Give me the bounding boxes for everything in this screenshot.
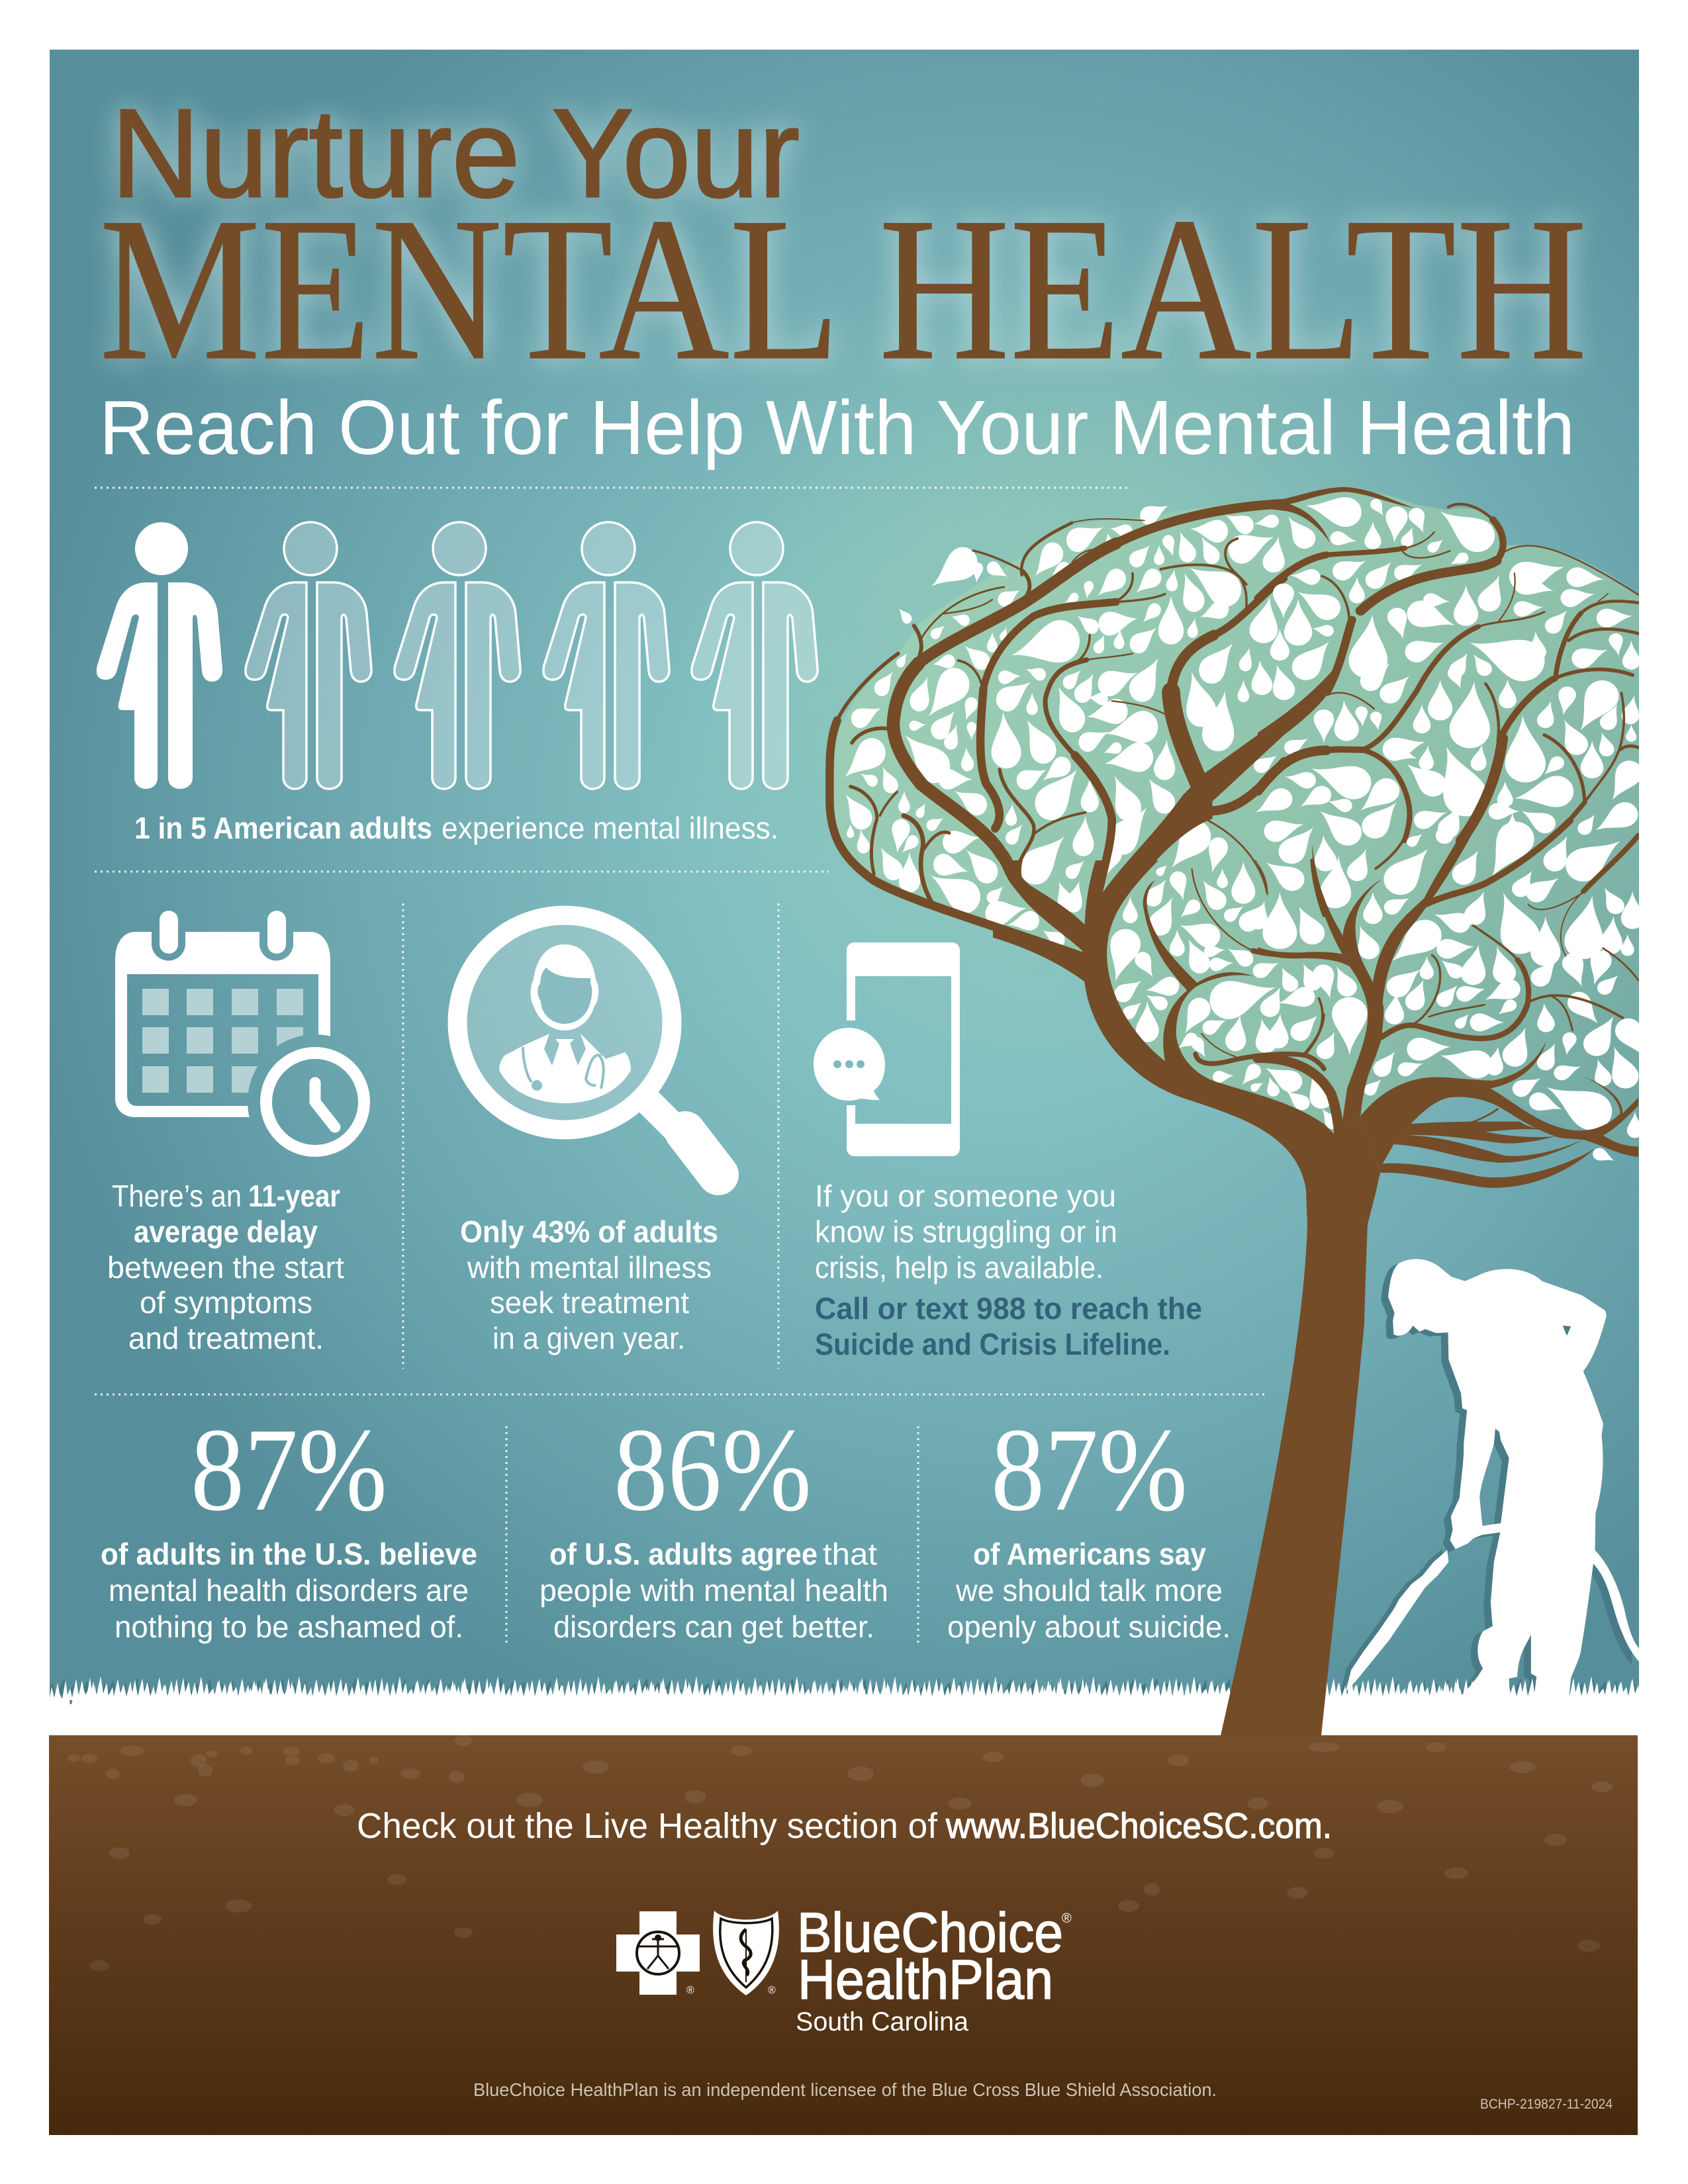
illustration: man's drop shadow (1340, 1262, 1632, 1714)
soil ground (49, 1735, 1638, 2135)
leaves: teardrops lower right (1248, 813, 1657, 1166)
title: Nurture Your Mental Health (99, 83, 1587, 403)
icon: phone with chat bubble (814, 942, 960, 1156)
upper-left lobe (829, 498, 1284, 956)
stat: 86% can get better: of U.S. adults agree (549, 1537, 818, 1571)
text: crisis help: know is struggling or in (815, 1214, 1117, 1249)
central lobe (993, 860, 1324, 1191)
trunk (1221, 1124, 1380, 1735)
wordmark: BlueChoice (797, 1901, 1063, 1964)
stat: 86% can get better (539, 1404, 888, 1644)
text: crisis help: If you or someone you (815, 1179, 1116, 1213)
text: only 43% of adults: seek treatment (490, 1285, 689, 1320)
stat: 87% talk about suicide (947, 1404, 1231, 1644)
illustration: man watering with hose (1346, 1259, 1639, 1711)
text: crisis help (815, 1179, 1202, 1361)
grass strip (50, 1676, 1664, 1735)
branches upper left (829, 504, 1284, 956)
icon: magnifier with doctor (457, 915, 718, 1175)
stat: 87% not ashamed: of adults in the U.S. believe (101, 1537, 477, 1571)
footer link line: Check out the Live Healthy section of (357, 1806, 938, 1846)
text: only 43% of adults (460, 1214, 718, 1355)
wordmark: HealthPlan (798, 1948, 1053, 2011)
text: crisis help: Suicide and Crisis Lifeline. (815, 1327, 1170, 1361)
illustration: brain-shaped tree (828, 487, 1657, 1735)
stat: 87% talk about suicide: we should talk more (955, 1573, 1223, 1608)
text: 11-year delay: 11-year (248, 1179, 340, 1213)
text: 11-year delay: between the start (107, 1250, 344, 1285)
lower-right lobe (1248, 813, 1657, 1188)
text: only 43% of adults: in a given year. (492, 1321, 685, 1355)
text: crisis help: crisis, help is available. (815, 1250, 1103, 1285)
stat: 87% talk about suicide: 87% (991, 1404, 1188, 1535)
canopy foliage (828, 490, 1650, 1158)
wordmark (796, 1901, 1072, 2036)
text: crisis help: Call or text 988 to reach the (815, 1291, 1202, 1326)
stat: 87% not ashamed: 87% (191, 1404, 387, 1535)
text: 11-year delay: of symptoms (140, 1285, 312, 1320)
icon: cross (616, 1911, 700, 1996)
upper-right lobe (1247, 487, 1647, 851)
title: Nurture Your Mental Health: Nurture Your (111, 83, 800, 224)
wordmark: South Carolina (796, 2007, 969, 2036)
stat: 87% not ashamed (101, 1404, 477, 1644)
leaves: teardrops upper right (1247, 491, 1647, 851)
caption: 1 in 5: 1 in 5 American adults (134, 811, 432, 845)
footer link line: www.BlueChoiceSC.com. (945, 1806, 1332, 1846)
stat: 87% not ashamed: mental health disorders are (109, 1573, 469, 1608)
subtitle: Reach Out for Help With Your Mental Health (99, 385, 1575, 471)
stat: 86% can get better: disorders can get better. (553, 1610, 874, 1644)
text: 11-year delay: average delay (134, 1214, 318, 1249)
stat: 87% not ashamed: nothing to be ashamed of. (115, 1610, 463, 1644)
caption: 1 in 5 (134, 811, 778, 845)
icon: calendar with clock (115, 911, 364, 1151)
stat: 87% talk about suicide: openly about suicide. (947, 1610, 1231, 1644)
text: only 43% of adults: Only 43% of adults (460, 1214, 718, 1249)
icon: shield: ® (768, 1985, 776, 1996)
text: only 43% of adults: with mental illness (467, 1250, 712, 1285)
stat: 87% talk about suicide: of Americans say (973, 1537, 1206, 1571)
logo: BlueChoice HealthPlan South Carolina (616, 1901, 1072, 2036)
stat: 1 in 5 pictogram people (97, 522, 818, 789)
branches upper right (1258, 487, 1638, 841)
footer link line (357, 1806, 1332, 1846)
stat: 86% can get better: people with mental health (539, 1573, 888, 1608)
stat: 86% can get better: 86% (614, 1404, 812, 1535)
stat: 86% can get better: that (823, 1537, 877, 1571)
branches and main limb (993, 860, 1324, 1191)
panel: teal background (50, 50, 1639, 1735)
text: 11-year delay: and treatment. (128, 1321, 324, 1355)
wordmark: ® (1062, 1911, 1072, 1926)
branches and roots lower right (1258, 821, 1638, 1188)
icon: shield (713, 1911, 779, 1996)
job code: BCHP-219827-11-2024 (1480, 2097, 1613, 2112)
caption: 1 in 5: experience mental illness. (442, 811, 778, 845)
leaves: teardrops upper left (835, 498, 1278, 950)
text: 11-year delay: There’s an (112, 1179, 242, 1213)
icon: cross: ® (686, 1985, 694, 1996)
text: 11-year delay (107, 1179, 344, 1355)
disclaimer: BlueChoice HealthPlan is an independent licensee of the Blue Cross Blue Shield Association. (473, 2079, 1217, 2100)
leaves: teardrops central (1101, 862, 1281, 1093)
